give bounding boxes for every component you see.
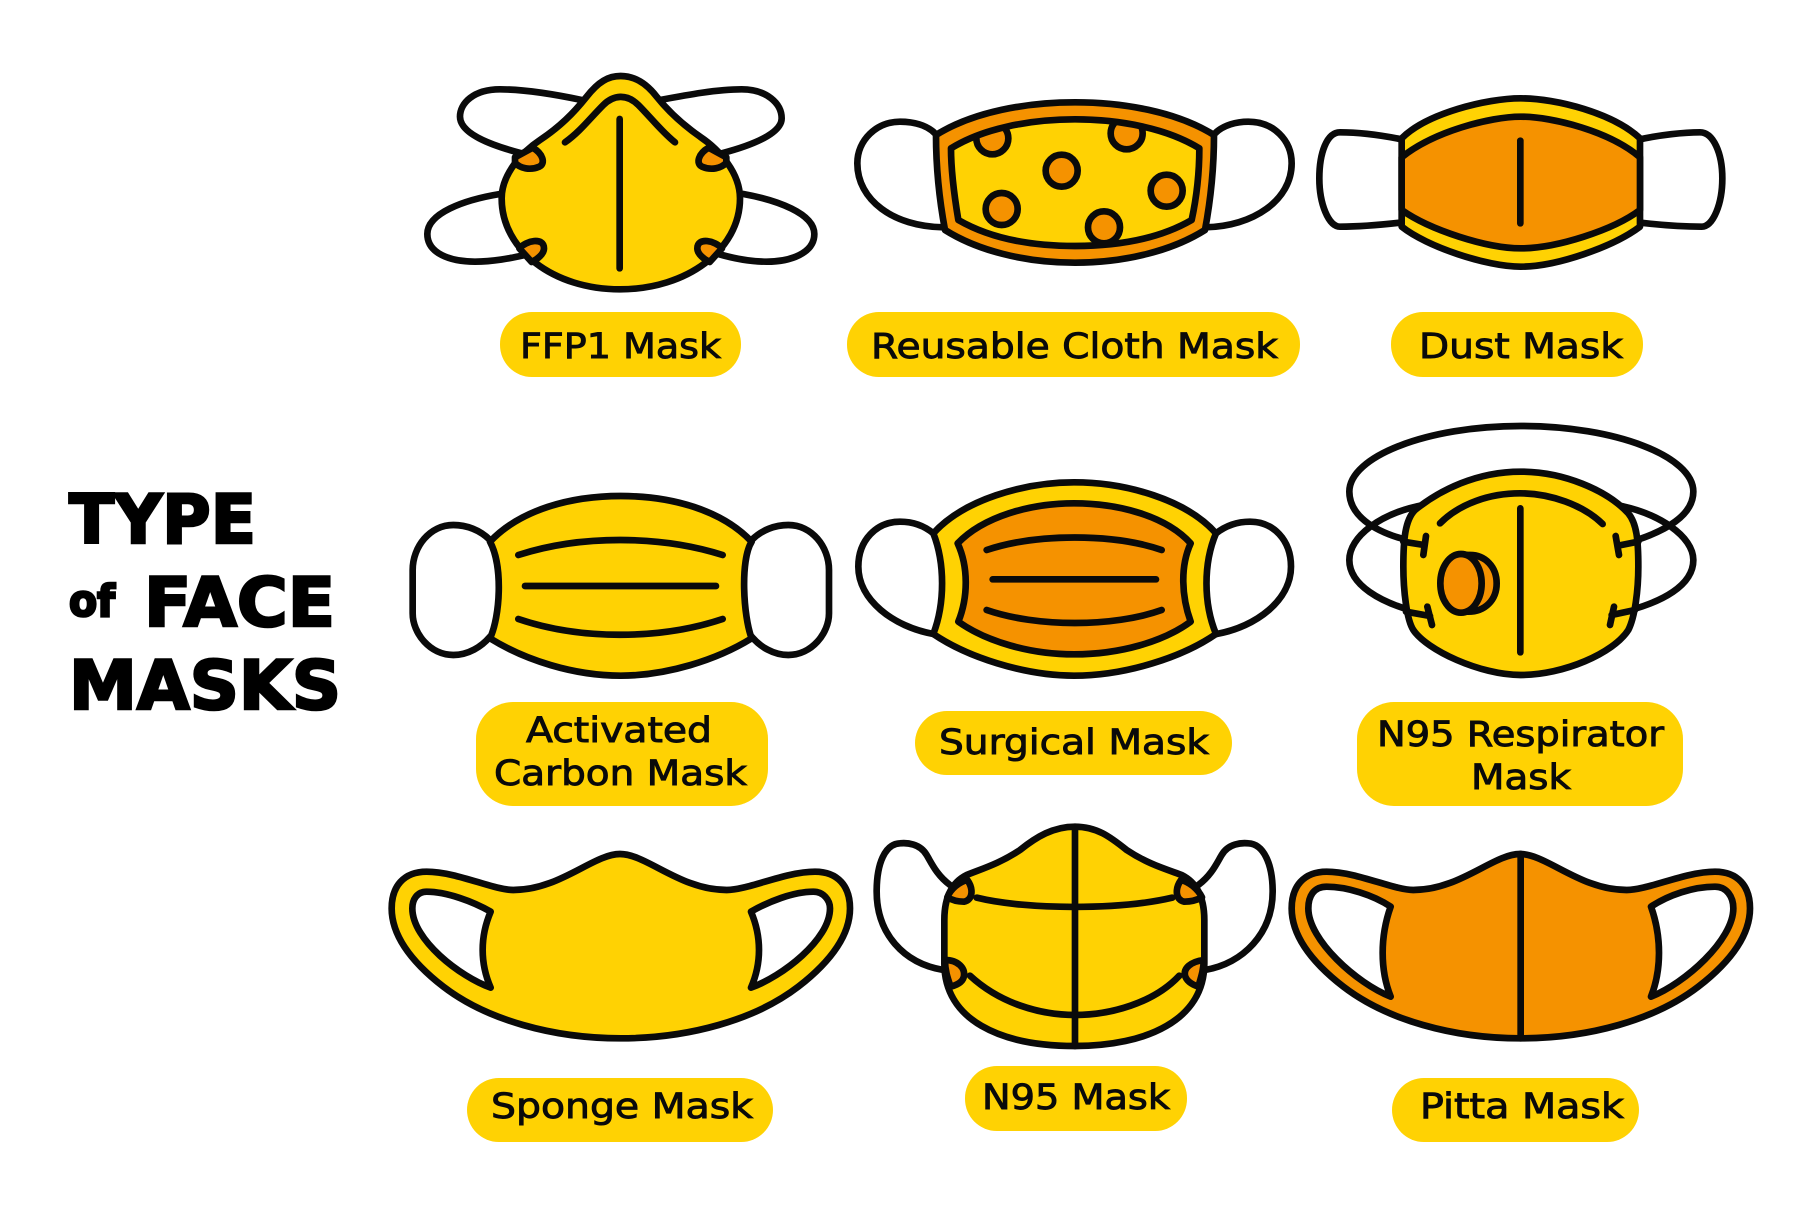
panel: pitta mask [1292, 854, 1750, 1142]
label: Dust Mask: Dust Mask [1419, 327, 1624, 367]
panel: N95 respirator mask [1349, 426, 1693, 806]
icon: FFP1 mask [427, 76, 814, 289]
label: Surgical Mask [915, 711, 1232, 775]
title: TYPE [69, 481, 256, 560]
panel: dust mask [1319, 98, 1722, 377]
label: Activated Carbon Mask: Carbon Mask [494, 754, 748, 794]
label: FFP1 Mask [500, 312, 741, 377]
label: N95 Respirator Mask [1357, 702, 1683, 806]
panel: surgical mask [858, 482, 1291, 775]
label: Sponge Mask: Sponge Mask [491, 1087, 754, 1127]
panel: sponge mask [392, 854, 850, 1142]
label: Surgical Mask: Surgical Mask [939, 723, 1210, 763]
panel: reusable cloth mask [847, 102, 1300, 377]
icon: surgical mask [858, 482, 1291, 676]
label: Pitta Mask: Pitta Mask [1420, 1087, 1625, 1127]
label: N95 Respirator Mask: N95 Respirator [1377, 715, 1665, 755]
label: Activated Carbon Mask [476, 702, 768, 806]
label: Reusable Cloth Mask [847, 312, 1300, 377]
icon: reusable cloth mask [857, 102, 1292, 263]
label: N95 Respirator Mask: Mask [1471, 758, 1572, 798]
label: N95 Mask [965, 1066, 1187, 1131]
icon: dust mask [1319, 98, 1722, 267]
icon: pitta mask [1292, 854, 1750, 1038]
icon: N95 respirator mask [1349, 426, 1693, 675]
panel: N95 mask [877, 827, 1273, 1131]
label: Sponge Mask [467, 1078, 773, 1142]
icon: sponge mask [392, 854, 850, 1038]
label: Activated Carbon Mask: Activated [526, 711, 712, 751]
label: Reusable Cloth Mask: Reusable Cloth Mask [871, 327, 1279, 367]
title: of [69, 576, 116, 627]
label: N95 Mask: N95 Mask [982, 1078, 1171, 1118]
icon: N95 mask [877, 827, 1273, 1046]
panel: activated carbon mask [413, 496, 829, 806]
label: Dust Mask [1391, 312, 1643, 377]
title: MASKS [69, 647, 341, 726]
title: FACE [144, 564, 335, 643]
panel: FFP1 mask [427, 76, 814, 377]
label: Pitta Mask [1392, 1078, 1639, 1142]
label: FFP1 Mask: FFP1 Mask [520, 327, 722, 367]
title [69, 481, 341, 726]
icon: activated carbon mask [413, 496, 829, 676]
